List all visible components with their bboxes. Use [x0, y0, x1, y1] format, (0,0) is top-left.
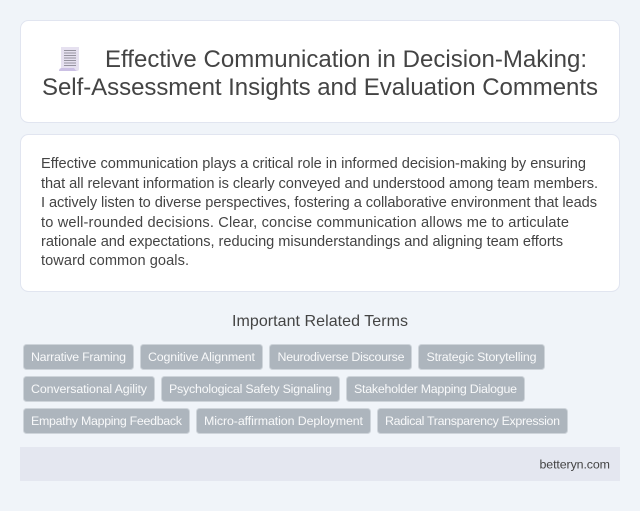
icon: scroll document	[59, 47, 79, 71]
tag: radical transparency expression: Radical Transparency Expression	[385, 414, 560, 428]
text block: description: Effective communication plays a critical role in informed decision-making by ensuring	[41, 156, 586, 172]
footer	[20, 447, 620, 481]
heading: important related terms: Important Related Terms	[232, 313, 408, 330]
text block: description: that all relevant information is clearly conveyed and understood among team members.	[41, 176, 598, 192]
tag: strategic storytelling	[418, 344, 544, 370]
panel: description card	[20, 134, 620, 292]
tag: narrative framing: Narrative Framing	[31, 350, 126, 364]
tag: strategic storytelling: Strategic Storytelling	[426, 350, 537, 364]
text block: description: rationale and expectations, reducing misunderstandings and aligning team efforts	[41, 234, 563, 250]
tag: narrative framing	[24, 344, 134, 370]
text block: description: I actively listen to diverse perspectives, fostering a collaborative environment that leads	[41, 195, 597, 211]
tag: psychological safety signaling	[162, 376, 340, 402]
panel: title card	[20, 20, 620, 122]
tag: conversational agility	[24, 376, 154, 402]
tag: empathy mapping feedback: Empathy Mapping Feedback	[31, 414, 183, 428]
tag: psychological safety signaling: Psychological Safety Signaling	[169, 382, 332, 396]
tag: stakeholder mapping dialogue	[346, 376, 524, 402]
title: Self-Assessment Insights and Evaluation Comments	[42, 74, 598, 101]
footer text: site name: betteryn.com	[540, 458, 610, 472]
tag: cognitive alignment: Cognitive Alignment	[148, 350, 256, 364]
text block: description: to well-rounded decisions. Clear, concise communication allows me to articulate	[41, 215, 569, 231]
tag: neurodiverse discourse	[270, 344, 412, 370]
tag: stakeholder mapping dialogue: Stakeholder Mapping Dialogue	[354, 382, 517, 396]
text block: description	[41, 156, 598, 269]
tag: micro-affirmation deployment: Micro-affirmation Deployment	[204, 414, 364, 428]
tag: micro-affirmation deployment	[196, 408, 370, 434]
title	[42, 46, 598, 101]
tag: neurodiverse discourse: Neurodiverse Discourse	[278, 350, 405, 364]
text block: description: toward common goals.	[41, 253, 189, 269]
tag: empathy mapping feedback	[24, 408, 190, 434]
tag: radical transparency expression	[378, 408, 568, 434]
title: Effective Communication in Decision-Making:	[105, 46, 587, 73]
tag: cognitive alignment	[140, 344, 262, 370]
tag: conversational agility: Conversational Agility	[31, 382, 148, 396]
tag list	[24, 344, 568, 434]
